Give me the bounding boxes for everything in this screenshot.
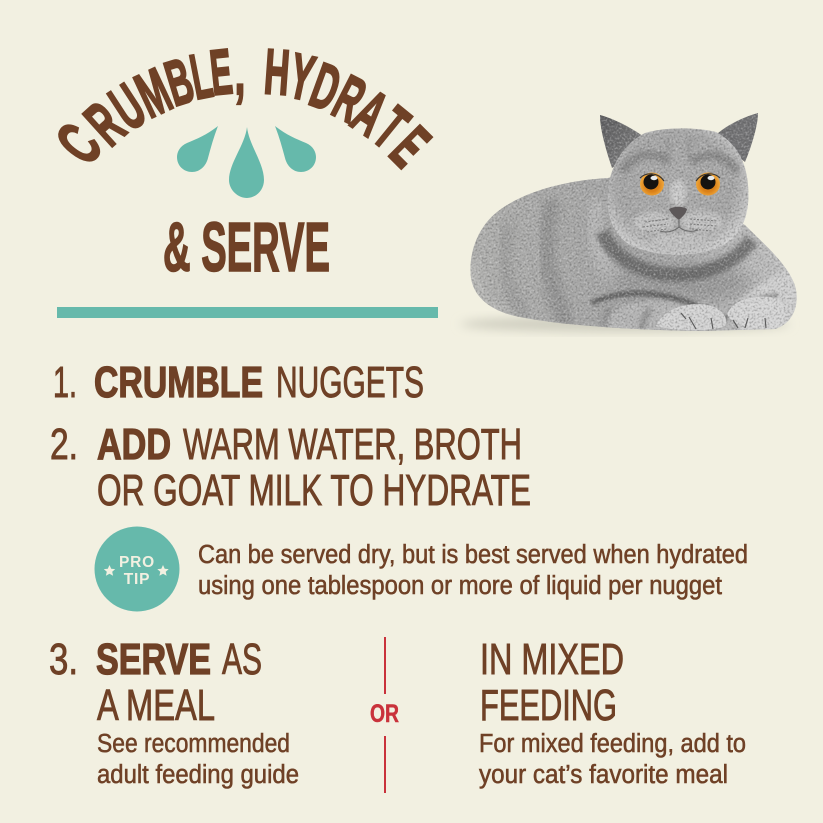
teal divider bar [57, 307, 438, 318]
step 2: WARM WATER, BROTH [183, 421, 522, 469]
step 3: serve as a meal: SERVE [96, 636, 211, 684]
title: arched heading: H [262, 35, 292, 108]
step 3: serve as a meal: See recommended [97, 730, 290, 758]
title: arched heading: D [302, 48, 350, 125]
pro tip text: Can be served dry, but is best served when hydrated [198, 541, 748, 569]
cat ears [600, 115, 648, 168]
title: arched heading: C [44, 112, 116, 177]
icon: water drops [177, 126, 316, 198]
step 1: 1. [53, 359, 77, 407]
cat paw toes [681, 313, 766, 329]
step 3: serve as a meal: adult feeding guide [97, 761, 299, 789]
pro tip text [198, 541, 748, 600]
step 3: in mixed feeding: IN MIXED [480, 636, 624, 684]
step 3: in mixed feeding [479, 636, 746, 789]
title: arched heading: U [97, 69, 157, 144]
red OR divider: OR [370, 700, 399, 728]
pro tip badge [94, 526, 180, 612]
step 3: serve as a meal: 3. [49, 636, 78, 684]
photo: grey cat [460, 113, 797, 332]
step 3: in mixed feeding: For mixed feeding, add to [479, 730, 746, 758]
step 1: CRUMBLE [94, 359, 263, 407]
step 1: NUGGETS [276, 359, 424, 407]
cat eyes [640, 172, 720, 196]
cat nose and mouth [643, 207, 718, 232]
pro tip badge: PRO [119, 554, 155, 571]
title: arched heading: R [71, 88, 138, 159]
step 3: serve as a meal [49, 636, 299, 789]
pro tip text: using one tablespoon or more of liquid per nugget [198, 572, 722, 600]
step 3: in mixed feeding: your cat’s favorite meal [479, 761, 728, 789]
title: arched heading: , [235, 37, 245, 109]
step 2: OR GOAT MILK TO HYDRATE [97, 467, 531, 515]
title: arched heading: E [377, 114, 443, 180]
cat head [608, 128, 748, 255]
title: arched heading: L [185, 39, 218, 113]
pro tip badge: TIP [124, 571, 150, 588]
title: arched heading: B [157, 44, 201, 120]
step 2: ADD [97, 421, 171, 469]
title: arched heading: A [341, 75, 401, 150]
title: arched heading: E [207, 35, 235, 109]
step 1 [53, 359, 424, 407]
cat fur body [470, 113, 797, 332]
step 3: serve as a meal: A MEAL [97, 682, 215, 730]
cat paws [656, 304, 726, 330]
step 2: 2. [50, 421, 78, 469]
step 2 [50, 421, 531, 515]
step 3: in mixed feeding: FEEDING [480, 682, 617, 730]
title: arched heading: Y [283, 39, 321, 114]
step 3: serve as a meal: AS [222, 636, 262, 684]
subtitle: & SERVE: & SERVE [163, 208, 330, 286]
title: arched heading: M [125, 54, 182, 131]
title: arched heading: T [361, 94, 422, 162]
title: arched heading [44, 35, 443, 180]
title: arched heading: R [323, 62, 376, 136]
